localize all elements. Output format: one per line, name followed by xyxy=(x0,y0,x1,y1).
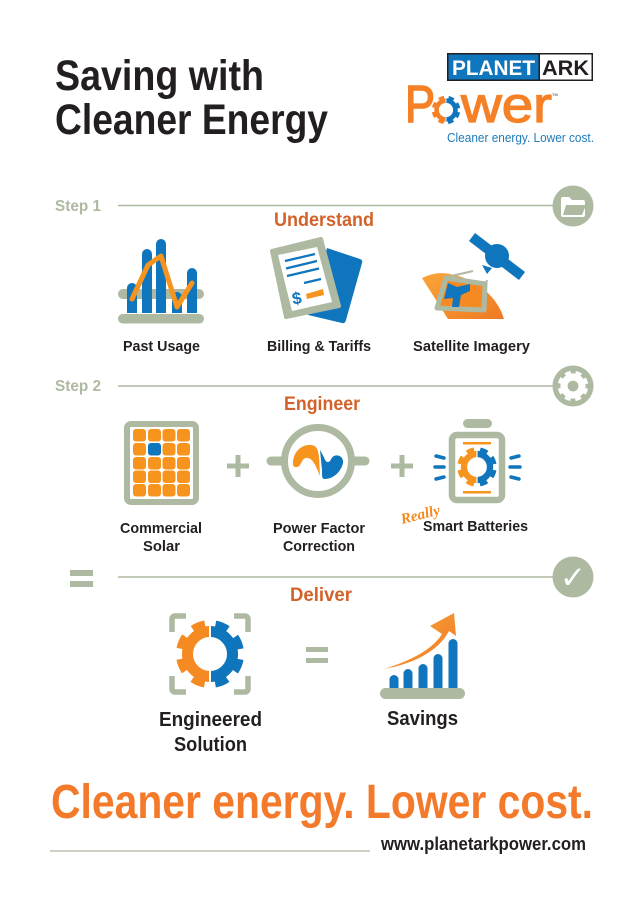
step 2 label: Step 2 xyxy=(55,378,101,395)
icon: settings gear xyxy=(552,366,594,406)
label: Past Usage: Past Usage xyxy=(123,338,200,355)
icon: smart battery xyxy=(435,419,520,500)
logo: Planet Ark Power: ARK xyxy=(542,57,589,80)
label: Engineered Solution: Engineered xyxy=(159,709,262,731)
label: Billing and Tariffs: Billing & Tariffs xyxy=(267,338,371,355)
label: Really: Really xyxy=(398,503,442,528)
step 1 label: Step 1 xyxy=(55,198,101,215)
icon: solar panel xyxy=(127,424,196,502)
icon: savings chart xyxy=(380,613,465,699)
label: Engineered Solution xyxy=(159,709,262,756)
heading: Understand: Understand xyxy=(274,210,374,231)
title: Cleaner Energy xyxy=(55,96,328,144)
equals sign middle xyxy=(306,647,328,663)
label: Satellite Imagery: Satellite Imagery xyxy=(413,338,531,355)
icon: billing document xyxy=(272,239,362,323)
label: Power Factor Correction: Power Factor xyxy=(273,520,365,537)
icon: engineered solution gear xyxy=(172,616,248,692)
logo: Planet Ark Power: wer xyxy=(460,77,552,133)
website url: www.planetarkpower.com xyxy=(380,834,586,854)
icon: check mark xyxy=(552,556,594,598)
label: Smart Batteries: Smart Batteries xyxy=(423,518,528,535)
title xyxy=(55,52,328,144)
logo: Planet Ark Power xyxy=(405,53,594,145)
plus sign 1 xyxy=(227,455,249,477)
logo: Planet Ark Power: P xyxy=(405,76,435,134)
label: Commercial Solar: Commercial xyxy=(120,520,202,537)
logo: Planet Ark Power: Cleaner energy. Lower cost. xyxy=(447,130,594,145)
label: Commercial Solar xyxy=(120,520,202,555)
icon: folder xyxy=(552,186,594,226)
icon: power factor correction xyxy=(271,428,365,494)
icon: check mark: ✓ xyxy=(560,560,586,596)
label: Engineered Solution: Solution xyxy=(174,734,247,756)
label: Power Factor Correction xyxy=(273,520,365,555)
label: Power Factor Correction: Correction xyxy=(283,538,355,555)
icon: billing document: $ xyxy=(291,288,304,309)
icon: satellite imagery xyxy=(422,237,522,319)
logo: Planet Ark Power: TM xyxy=(552,92,558,97)
title: Saving with xyxy=(55,52,264,100)
heading: Engineer: Engineer xyxy=(284,394,361,415)
heading: Deliver: Deliver xyxy=(290,585,353,606)
plus sign 2 xyxy=(391,455,413,477)
icon: past usage chart xyxy=(118,239,204,324)
label: Commercial Solar: Solar xyxy=(143,538,180,555)
logo: Planet Ark Power: PLANET xyxy=(452,57,535,80)
equals sign left xyxy=(70,570,93,587)
label: Savings: Savings xyxy=(387,708,458,730)
